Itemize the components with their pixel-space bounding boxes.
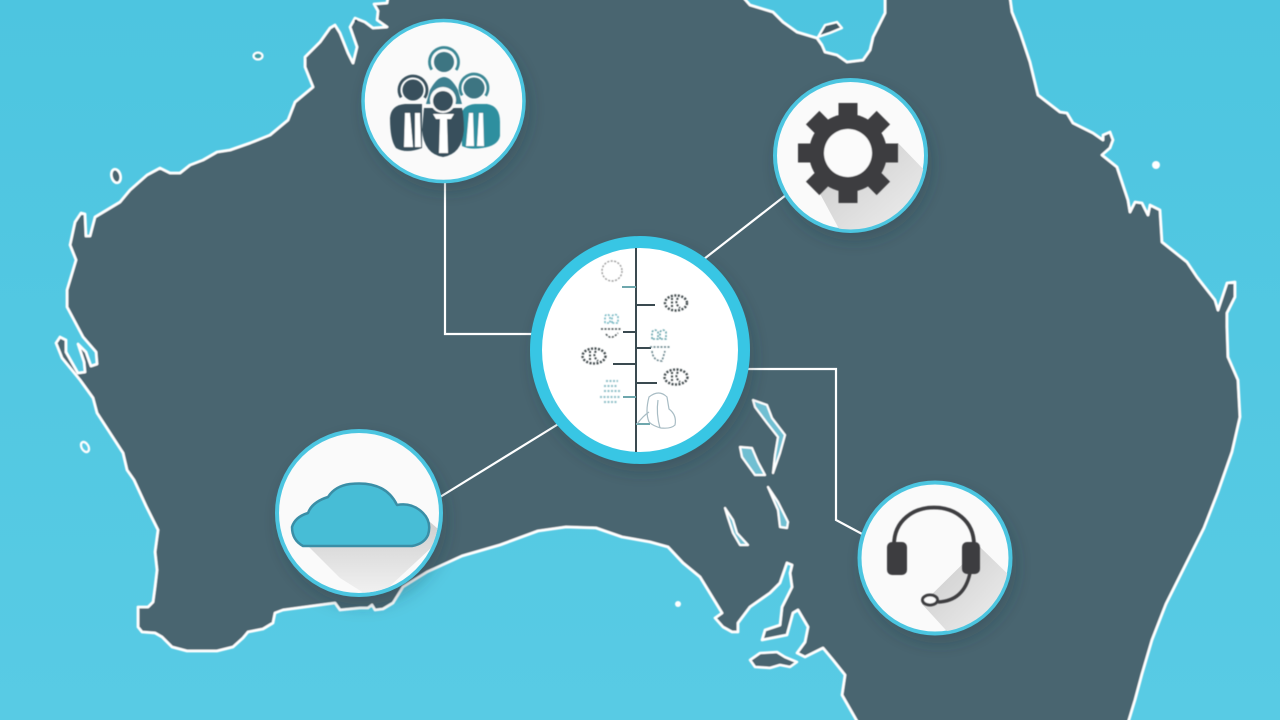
island: north-west dot [254, 52, 262, 60]
icon: gear [798, 103, 898, 203]
timeline: dotted milestone icons [582, 261, 688, 402]
icon circle: headset [860, 482, 1012, 640]
connector: gear to hub [704, 195, 786, 259]
long shadow: cloud [310, 522, 438, 593]
island: west coast [79, 440, 91, 454]
island: southern speck [675, 601, 681, 607]
connector: headset to hub [745, 369, 864, 535]
island: top-left speck [354, 20, 358, 22]
connector lines [440, 180, 864, 535]
island: north-west coast [110, 168, 122, 184]
island: Kangaroo [750, 652, 797, 668]
island: Carpentaria [818, 22, 842, 37]
islands: coastal isles [79, 20, 1160, 668]
icon: cloud [292, 483, 429, 546]
connector: people to hub [445, 180, 534, 334]
icon: headset [887, 508, 980, 605]
timeline: faint person sketch [637, 393, 675, 428]
long shadow: gear [820, 143, 924, 230]
long shadow: headset [922, 547, 1008, 631]
icon circle: people [363, 20, 524, 182]
central hub circle [536, 242, 744, 458]
island: Coral Sea dot [1152, 161, 1160, 169]
icon: group of people [390, 42, 500, 157]
timeline: spine and ticks [613, 248, 657, 452]
lakes: inland outlines [725, 400, 788, 545]
icon circle: cloud [277, 431, 445, 600]
icon circle: gear [775, 80, 930, 240]
connector: cloud to hub [440, 423, 560, 497]
